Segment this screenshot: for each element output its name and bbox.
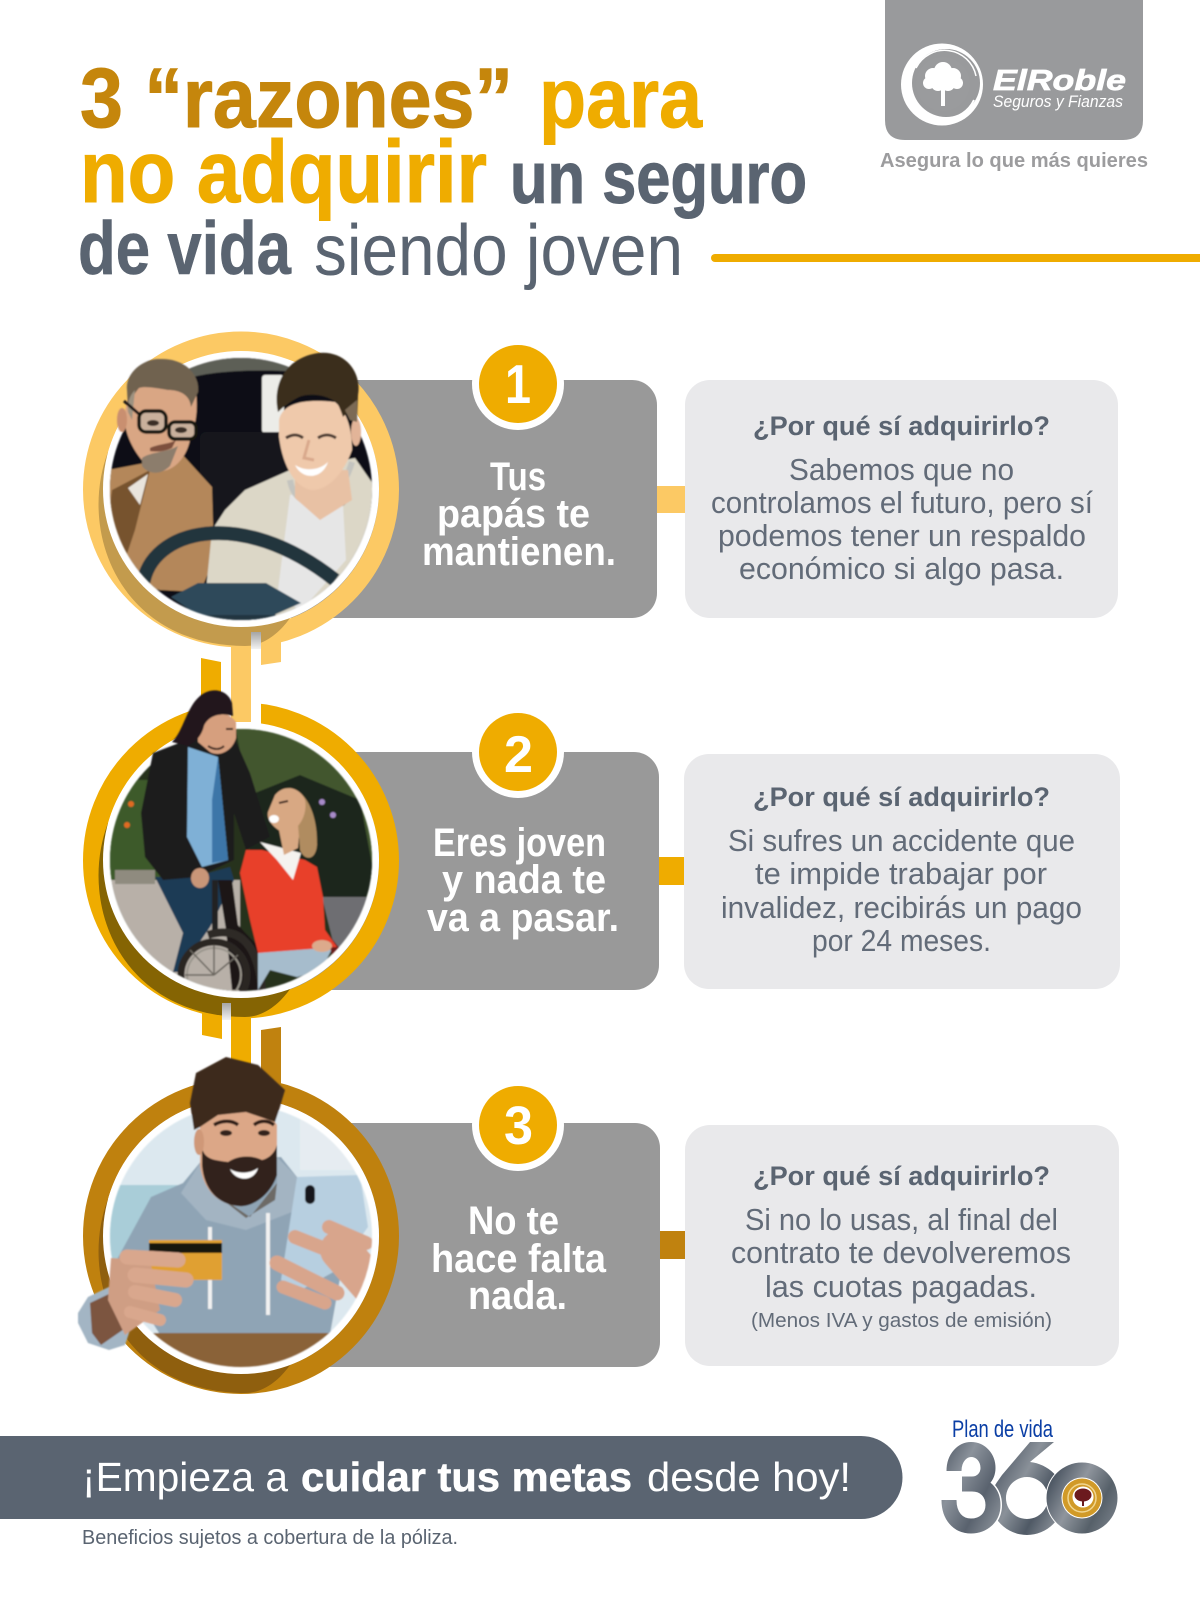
answer card 2: por 24 meses.: [812, 923, 991, 958]
ring 1: [93, 342, 389, 649]
gold connector 3: [660, 1231, 686, 1259]
number badge 1: [472, 338, 564, 430]
card 2 text: y nada te: [442, 858, 606, 902]
title line 2: un seguro: [510, 138, 807, 219]
logo: El Roble: ElRoble: [993, 65, 1126, 97]
answer card 1: controlamos el futuro, pero sí: [711, 485, 1093, 520]
footer banner: [0, 1436, 902, 1519]
panel: reason 2: [93, 690, 1120, 1020]
answer card 3: Si no lo usas, al final del: [745, 1202, 1058, 1237]
connector bars between photos 1 and 2: [201, 635, 281, 722]
answer card 2: [684, 754, 1120, 989]
panel: reason 3: [78, 1057, 1119, 1393]
card 3 text: hace falta: [431, 1237, 607, 1281]
card 1 text: Tus: [490, 455, 546, 499]
title line 3: siendo joven: [314, 211, 683, 291]
man head: [125, 375, 197, 471]
card 1 text: [422, 455, 616, 574]
logo: Plan de vida 360: [949, 1416, 1118, 1535]
answer card 3: las cuotas pagadas.: [765, 1269, 1037, 1304]
answer card 2: Si sufres un accidente que: [728, 823, 1075, 858]
answer card 1: ¿Por qué sí adquirirlo?: [753, 411, 1050, 441]
answer card 3: (Menos IVA y gastos de emisión): [751, 1310, 1052, 1332]
title line 1: 3 “razones”: [80, 51, 513, 145]
photo: woman pushing wheelchair: [100, 690, 380, 1008]
bank card: [149, 1240, 222, 1280]
photo: father and son in a car: [109, 352, 373, 622]
title: [78, 51, 807, 291]
footer banner: desde hoy!: [647, 1454, 851, 1500]
ring 3: [93, 1088, 389, 1393]
card 2 text: va a pasar.: [427, 896, 619, 940]
answer card 3: ¿Por qué sí adquirirlo?: [753, 1161, 1050, 1191]
title rule: [711, 254, 1200, 262]
footer banner: ¡Empieza a: [82, 1454, 288, 1500]
grey card 2: [241, 752, 659, 990]
title line 2: no adquirir: [80, 122, 487, 221]
title line 2: [80, 122, 807, 221]
answer card 1: [685, 380, 1118, 618]
left arm and hand: [78, 1285, 130, 1350]
answer card 3: contrato te devolveremos: [731, 1235, 1071, 1270]
title line 3: de vida: [78, 206, 292, 290]
connector bars between photos 2 and 3: [202, 1005, 281, 1095]
boy head: [295, 470, 352, 520]
card 2 text: Eres joven: [433, 821, 606, 865]
card 3 text: nada.: [468, 1274, 567, 1318]
gold connector 1: [657, 486, 686, 513]
answer card 3: [685, 1125, 1119, 1366]
footer banner: cuidar tus metas: [301, 1454, 632, 1500]
card 2 text: [427, 821, 619, 940]
logo: El Roble: [885, 0, 1143, 140]
card 1 text: papás te: [437, 492, 590, 536]
logo: El Roble: Seguros y Fianzas: [993, 92, 1123, 111]
man head: [200, 1108, 277, 1206]
standing woman: [155, 867, 234, 972]
gold connector 2: [659, 857, 685, 885]
answer card 2: invalidez, recibirás un pago: [721, 890, 1082, 925]
answer card 1: económico si algo pasa.: [739, 551, 1064, 586]
number badge 3: [472, 1079, 564, 1171]
card 1 text: mantienen.: [422, 530, 616, 574]
answer card 1: podemos tener un respaldo: [718, 518, 1086, 553]
panel: reason 1: [93, 338, 1118, 649]
number badge 3: 3: [504, 1096, 533, 1156]
seated woman and wheelchair: [176, 880, 339, 992]
number badge 2: [472, 706, 564, 798]
answer card 2: ¿Por qué sí adquirirlo?: [753, 782, 1050, 812]
card 3 text: [431, 1199, 607, 1318]
number badge 2: 2: [504, 726, 533, 784]
title line 3: [78, 206, 683, 291]
logo: Plan de vida 360: Plan de vida: [952, 1416, 1053, 1443]
tagline: Asegura lo que más quieres: [880, 150, 1148, 172]
grey card 1: [241, 380, 657, 618]
footnote: Beneficios sujetos a cobertura de la póliza.: [82, 1527, 458, 1549]
answer card 2: te impide trabajar por: [755, 856, 1047, 891]
photo: man with card and phone: [78, 1057, 380, 1380]
right hand fingers: [277, 1227, 375, 1303]
answer card 1: Sabemos que no: [789, 452, 1014, 487]
card 3 text: No te: [468, 1199, 559, 1243]
title line 1: para: [539, 51, 703, 145]
number badge 1: 1: [505, 353, 531, 415]
ring 2: [93, 695, 389, 1020]
grey card 3: [241, 1123, 660, 1367]
